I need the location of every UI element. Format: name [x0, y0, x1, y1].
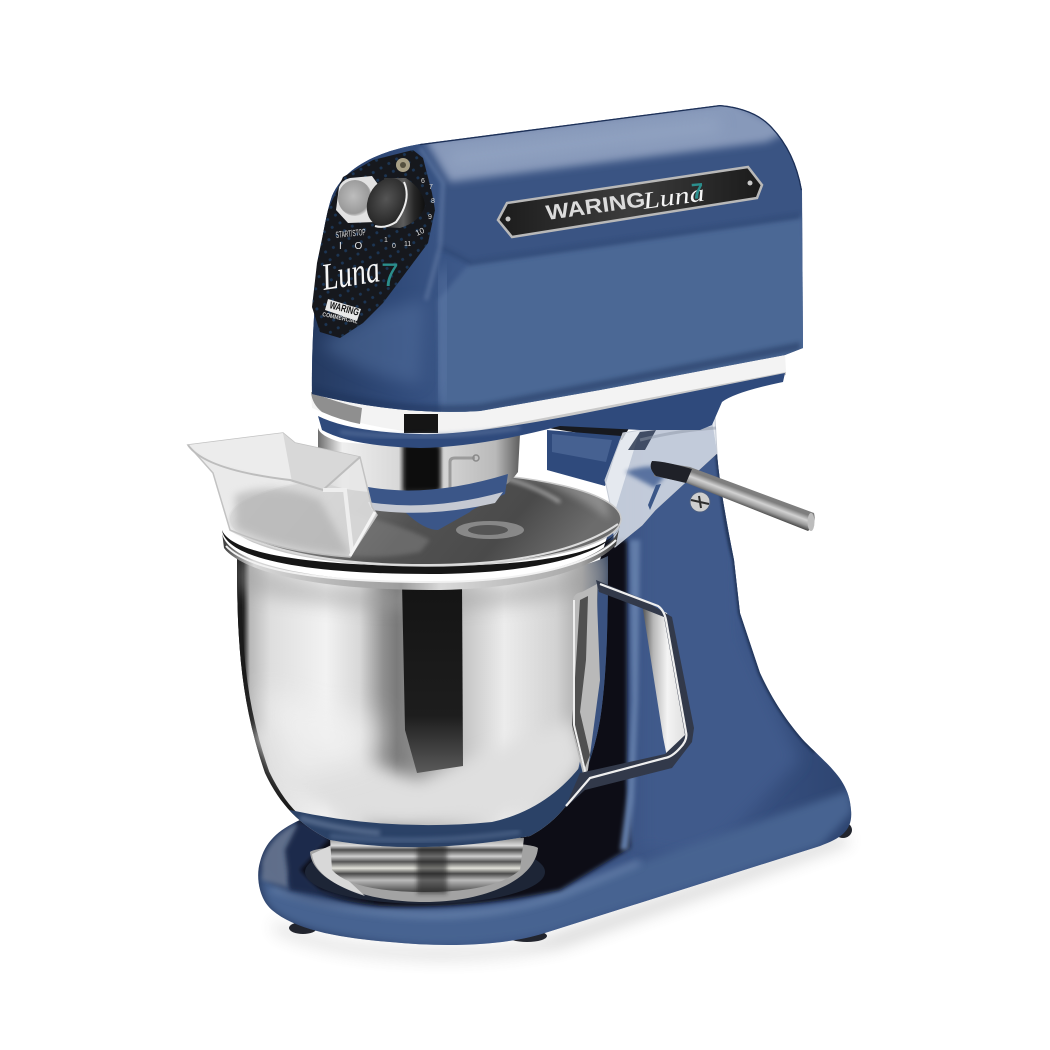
- model 7: 7: [690, 178, 705, 204]
- handle highlight line: [566, 584, 686, 806]
- clear feed chute: [188, 433, 377, 557]
- indicator lamp: [396, 158, 410, 172]
- ridged bowl foot: [305, 838, 545, 904]
- bowl lift screw: [690, 492, 710, 512]
- clear bowl guard bracket: [605, 418, 717, 547]
- rubber feet: [289, 822, 852, 942]
- speed knob: [359, 171, 425, 233]
- speed scale numbers: 11: [404, 241, 411, 248]
- Waring logo badge: WARING: [328, 300, 360, 319]
- bowl rim: [222, 524, 620, 590]
- blue base reflection: [290, 748, 594, 848]
- product photo: stand mixer: [186, 105, 852, 964]
- head top dark edge: [420, 105, 802, 190]
- speed scale numbers: 6: [421, 178, 425, 185]
- speed scale numbers: 7: [429, 184, 433, 191]
- commercial label: COMMERCIAL: [322, 312, 358, 325]
- handle left bracket on bowl: [572, 584, 600, 778]
- Waring wordmark: WARING: [544, 188, 647, 225]
- start stop label: START/STOP: [335, 227, 366, 240]
- control panel: [312, 150, 435, 338]
- speed scale numbers: 9: [428, 214, 432, 221]
- model number 7: 7: [381, 257, 399, 293]
- dark reflection around bowl: [288, 540, 630, 907]
- mixer head housing: [305, 100, 808, 420]
- transparent bowl lid: [230, 476, 622, 567]
- bowl lift lever: [651, 461, 815, 531]
- attachment hub: [318, 428, 520, 530]
- Luna wordmark: Luna: [640, 181, 706, 215]
- bowl right edge: [578, 590, 608, 769]
- column and base casting: [258, 420, 852, 945]
- attachment hub block: [547, 410, 640, 486]
- speed scale numbers: 10: [414, 226, 426, 238]
- Luna script: Luna: [318, 248, 383, 299]
- column outer edge shading: [717, 453, 815, 752]
- blue collar lip and column neck: [318, 373, 785, 448]
- head lower panel: [438, 216, 808, 420]
- speed scale numbers: 8: [431, 198, 435, 205]
- column upper body tone: [717, 454, 797, 804]
- bowl handle: [565, 580, 694, 808]
- speed scale numbers: 0: [392, 243, 396, 250]
- head rounded front: [312, 144, 440, 412]
- chrome collar band: [311, 353, 786, 438]
- bowl rim shadow: [237, 556, 608, 610]
- head side corner lines: [420, 148, 443, 300]
- start stop button: [336, 176, 382, 223]
- handle white plate: [642, 603, 688, 762]
- base front edge highlight: [261, 790, 852, 944]
- ground shadow: [275, 835, 850, 958]
- bowl lower light area: [250, 720, 585, 828]
- head bottom shadow line: [312, 342, 800, 413]
- speed scale numbers: [384, 178, 435, 250]
- Waring logo badge: [325, 299, 361, 321]
- nameplate: [498, 167, 762, 237]
- speed scale numbers: 1: [384, 237, 388, 244]
- head top light bevel: [425, 100, 790, 182]
- bowl centre reflection: [402, 582, 463, 773]
- on off symbols: I O: [339, 241, 367, 252]
- handle outer strap: [565, 580, 694, 808]
- stainless mixing bowl: [237, 556, 608, 848]
- bowl left dark edge: [238, 556, 300, 820]
